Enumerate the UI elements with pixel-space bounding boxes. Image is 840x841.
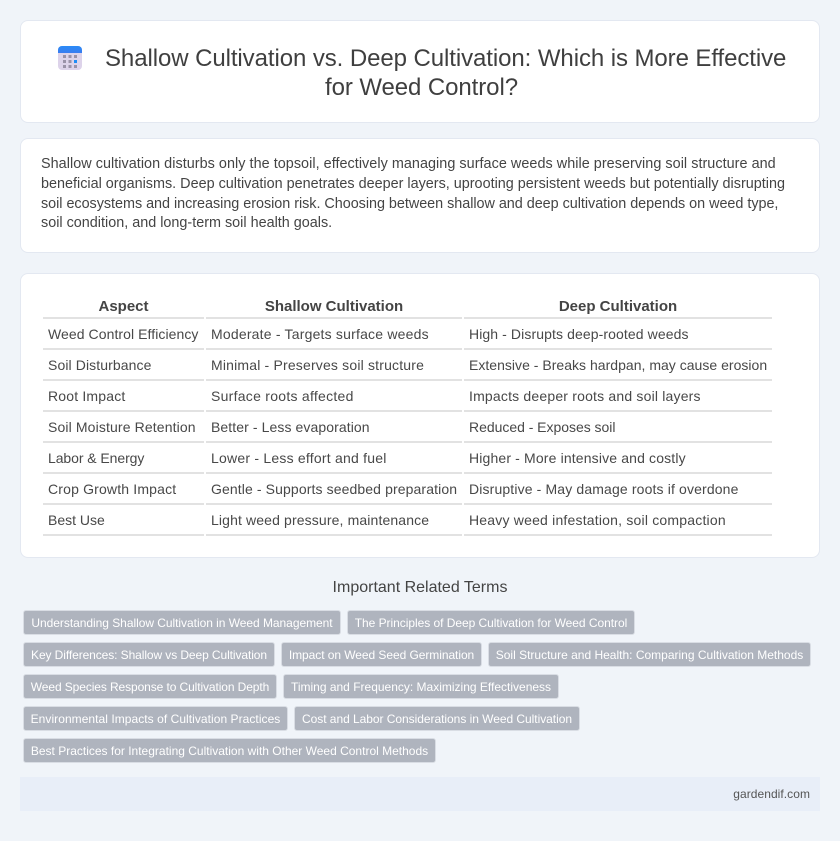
table: Higher - More intensive and costly <box>469 450 686 466</box>
table: Surface roots affected <box>211 388 354 404</box>
table: Aspect <box>98 298 149 315</box>
table: Reduced - Exposes soil <box>469 419 615 435</box>
related terms tags: Environmental Impacts of Cultivation Practices <box>31 712 280 726</box>
table: Labor & Energy <box>48 450 144 466</box>
intro text: soil condition, and long-term soil health goals. <box>41 215 332 231</box>
table: Heavy weed infestation, soil compaction <box>469 512 726 528</box>
table: Deep Cultivation <box>559 298 677 315</box>
table: Best Use <box>48 512 105 528</box>
related terms tags: The Principles of Deep Cultivation for Weed Control <box>355 616 627 630</box>
table: High - Disrupts deep-rooted weeds <box>469 326 689 342</box>
related terms heading: Important Related Terms <box>333 579 507 596</box>
footer credit: gardendif.com <box>733 787 810 801</box>
intro card <box>20 138 820 253</box>
table: Disruptive - May damage roots if overdone <box>469 481 739 497</box>
table: Weed Control Efficiency <box>48 326 198 342</box>
comparison table card <box>20 273 820 558</box>
table: Root Impact <box>48 388 125 404</box>
table: Soil Moisture Retention <box>48 419 196 435</box>
footer bar <box>20 777 820 811</box>
icon: calendar <box>58 46 82 70</box>
intro text: beneficial organisms. Deep cultivation penetrates deeper layers, uprooting persistent weeds but potentially disrupting <box>41 176 785 192</box>
title card <box>20 20 820 123</box>
related terms tags: Impact on Weed Seed Germination <box>289 648 474 662</box>
table: Gentle - Supports seedbed preparation <box>211 481 457 497</box>
related terms tags: Key Differences: Shallow vs Deep Cultivation <box>31 648 267 662</box>
table: Better - Less evaporation <box>211 419 370 435</box>
intro text <box>41 156 785 231</box>
table: Impacts deeper roots and soil layers <box>469 388 701 404</box>
related terms tags: Understanding Shallow Cultivation in Weed Management <box>31 616 333 630</box>
table: Moderate - Targets surface weeds <box>211 326 429 342</box>
table: Minimal - Preserves soil structure <box>211 357 424 373</box>
table: Shallow Cultivation <box>265 298 403 315</box>
table: Extensive - Breaks hardpan, may cause erosion <box>469 357 767 373</box>
title: Shallow Cultivation vs. Deep Cultivation: Which is More Effective <box>105 45 786 72</box>
related terms tags: Cost and Labor Considerations in Weed Cultivation <box>302 712 572 726</box>
intro text: Shallow cultivation disturbs only the topsoil, effectively managing surface weeds while preserving soil structure and <box>41 156 776 172</box>
table: Lower - Less effort and fuel <box>211 450 387 466</box>
related terms tags <box>23 610 811 763</box>
title <box>105 45 786 101</box>
table <box>43 298 772 536</box>
related terms tags: Best Practices for Integrating Cultivation with Other Weed Control Methods <box>31 744 428 758</box>
related terms tags: Timing and Frequency: Maximizing Effectiveness <box>291 680 551 694</box>
table: Crop Growth Impact <box>48 481 176 497</box>
table: Light weed pressure, maintenance <box>211 512 429 528</box>
table: Soil Disturbance <box>48 357 152 373</box>
title: for Weed Control? <box>325 74 518 101</box>
intro text: soil ecosystems and increasing erosion risk. Choosing between shallow and deep cultivation depends on weed type, <box>41 196 778 212</box>
related terms tags: Soil Structure and Health: Comparing Cultivation Methods <box>496 648 803 662</box>
related terms tags: Weed Species Response to Cultivation Depth <box>31 680 269 694</box>
